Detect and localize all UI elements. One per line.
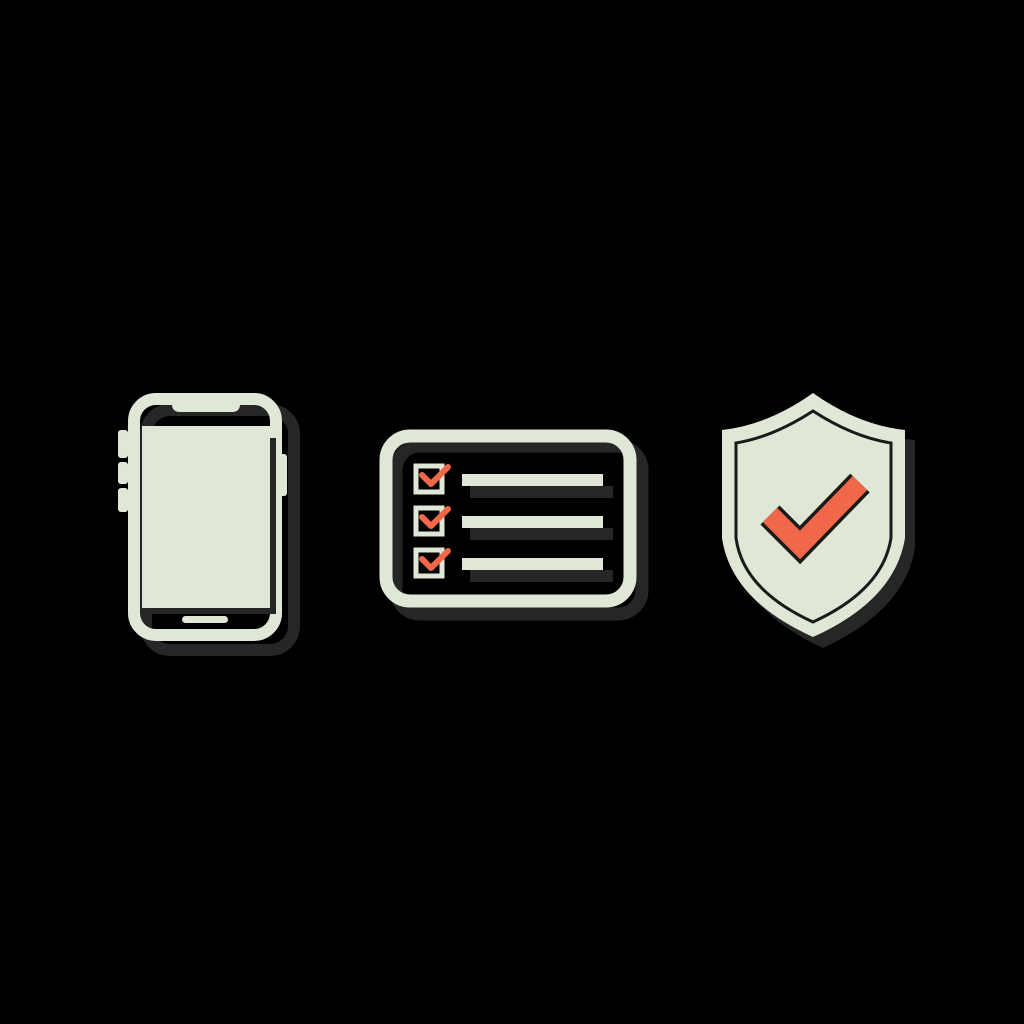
icon: shield with check — [722, 393, 915, 648]
check mark — [770, 483, 860, 545]
icon: smartphone — [118, 396, 294, 650]
checklist rows — [416, 466, 613, 582]
icon: checklist card — [386, 436, 642, 614]
